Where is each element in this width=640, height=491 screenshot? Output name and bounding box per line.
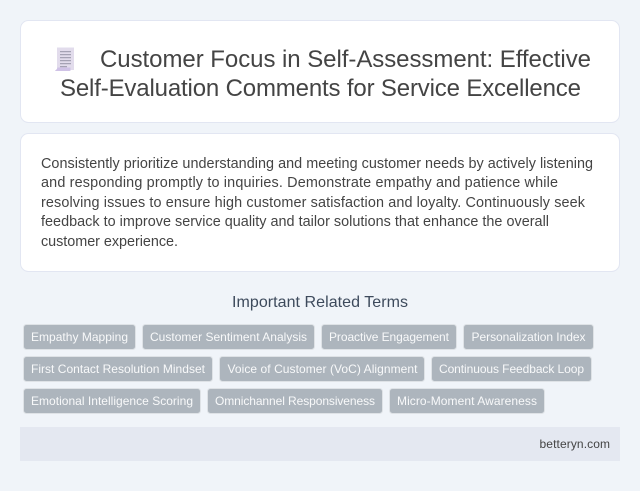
summary text: resolving issues to ensure high customer satisfaction and loyalty. Continuously seek — [41, 195, 586, 211]
tag: Emotional Intelligence Scoring: Emotional Intelligence Scoring — [31, 394, 193, 408]
tag: Personalization Index — [464, 324, 594, 350]
related terms tags — [24, 324, 594, 414]
heading: related terms: Important Related Terms — [232, 294, 408, 311]
tag: Omnichannel Responsiveness: Omnichannel Responsiveness — [215, 394, 375, 408]
title: Customer Focus in Self-Assessment: Effective — [100, 46, 591, 73]
footer bar — [20, 427, 620, 461]
tag: First Contact Resolution Mindset: First Contact Resolution Mindset — [31, 362, 206, 376]
tag: Micro-Moment Awareness: Micro-Moment Awareness — [397, 394, 537, 408]
tag: Emotional Intelligence Scoring — [24, 388, 200, 414]
tag: Omnichannel Responsiveness — [208, 388, 382, 414]
tag: Voice of Customer (VoC) Alignment: Voice of Customer (VoC) Alignment — [228, 362, 418, 376]
summary text: Consistently prioritize understanding and meeting customer needs by actively listening — [41, 156, 593, 172]
summary text: customer experience. — [41, 234, 178, 250]
tag: First Contact Resolution Mindset — [24, 356, 212, 382]
tag: Voice of Customer (VoC) Alignment — [220, 356, 424, 382]
summary text: and responding promptly to inquiries. Demonstrate empathy and patience while — [41, 175, 558, 191]
summary text — [41, 156, 593, 250]
panel: title card — [20, 20, 620, 122]
tag: Empathy Mapping: Empathy Mapping — [31, 330, 128, 344]
tag: Customer Sentiment Analysis: Customer Sentiment Analysis — [150, 330, 307, 344]
panel: summary card — [20, 134, 620, 272]
footer: site name: betteryn.com — [540, 437, 610, 451]
tag: Micro-Moment Awareness — [390, 388, 544, 414]
tag: Continuous Feedback Loop: Continuous Feedback Loop — [439, 362, 584, 376]
title: Self-Evaluation Comments for Service Excellence — [60, 75, 581, 102]
summary text: feedback to improve service quality and tailor solutions that enhance the overall — [41, 214, 549, 230]
tag: Proactive Engagement: Proactive Engagement — [329, 330, 450, 344]
title — [60, 46, 591, 102]
tag: Empathy Mapping — [24, 324, 136, 350]
tag: Proactive Engagement — [322, 324, 456, 350]
tag: Continuous Feedback Loop — [432, 356, 592, 382]
icon: document scroll — [55, 48, 74, 71]
tag: Personalization Index: Personalization Index — [472, 330, 586, 344]
tag: Customer Sentiment Analysis — [142, 324, 314, 350]
